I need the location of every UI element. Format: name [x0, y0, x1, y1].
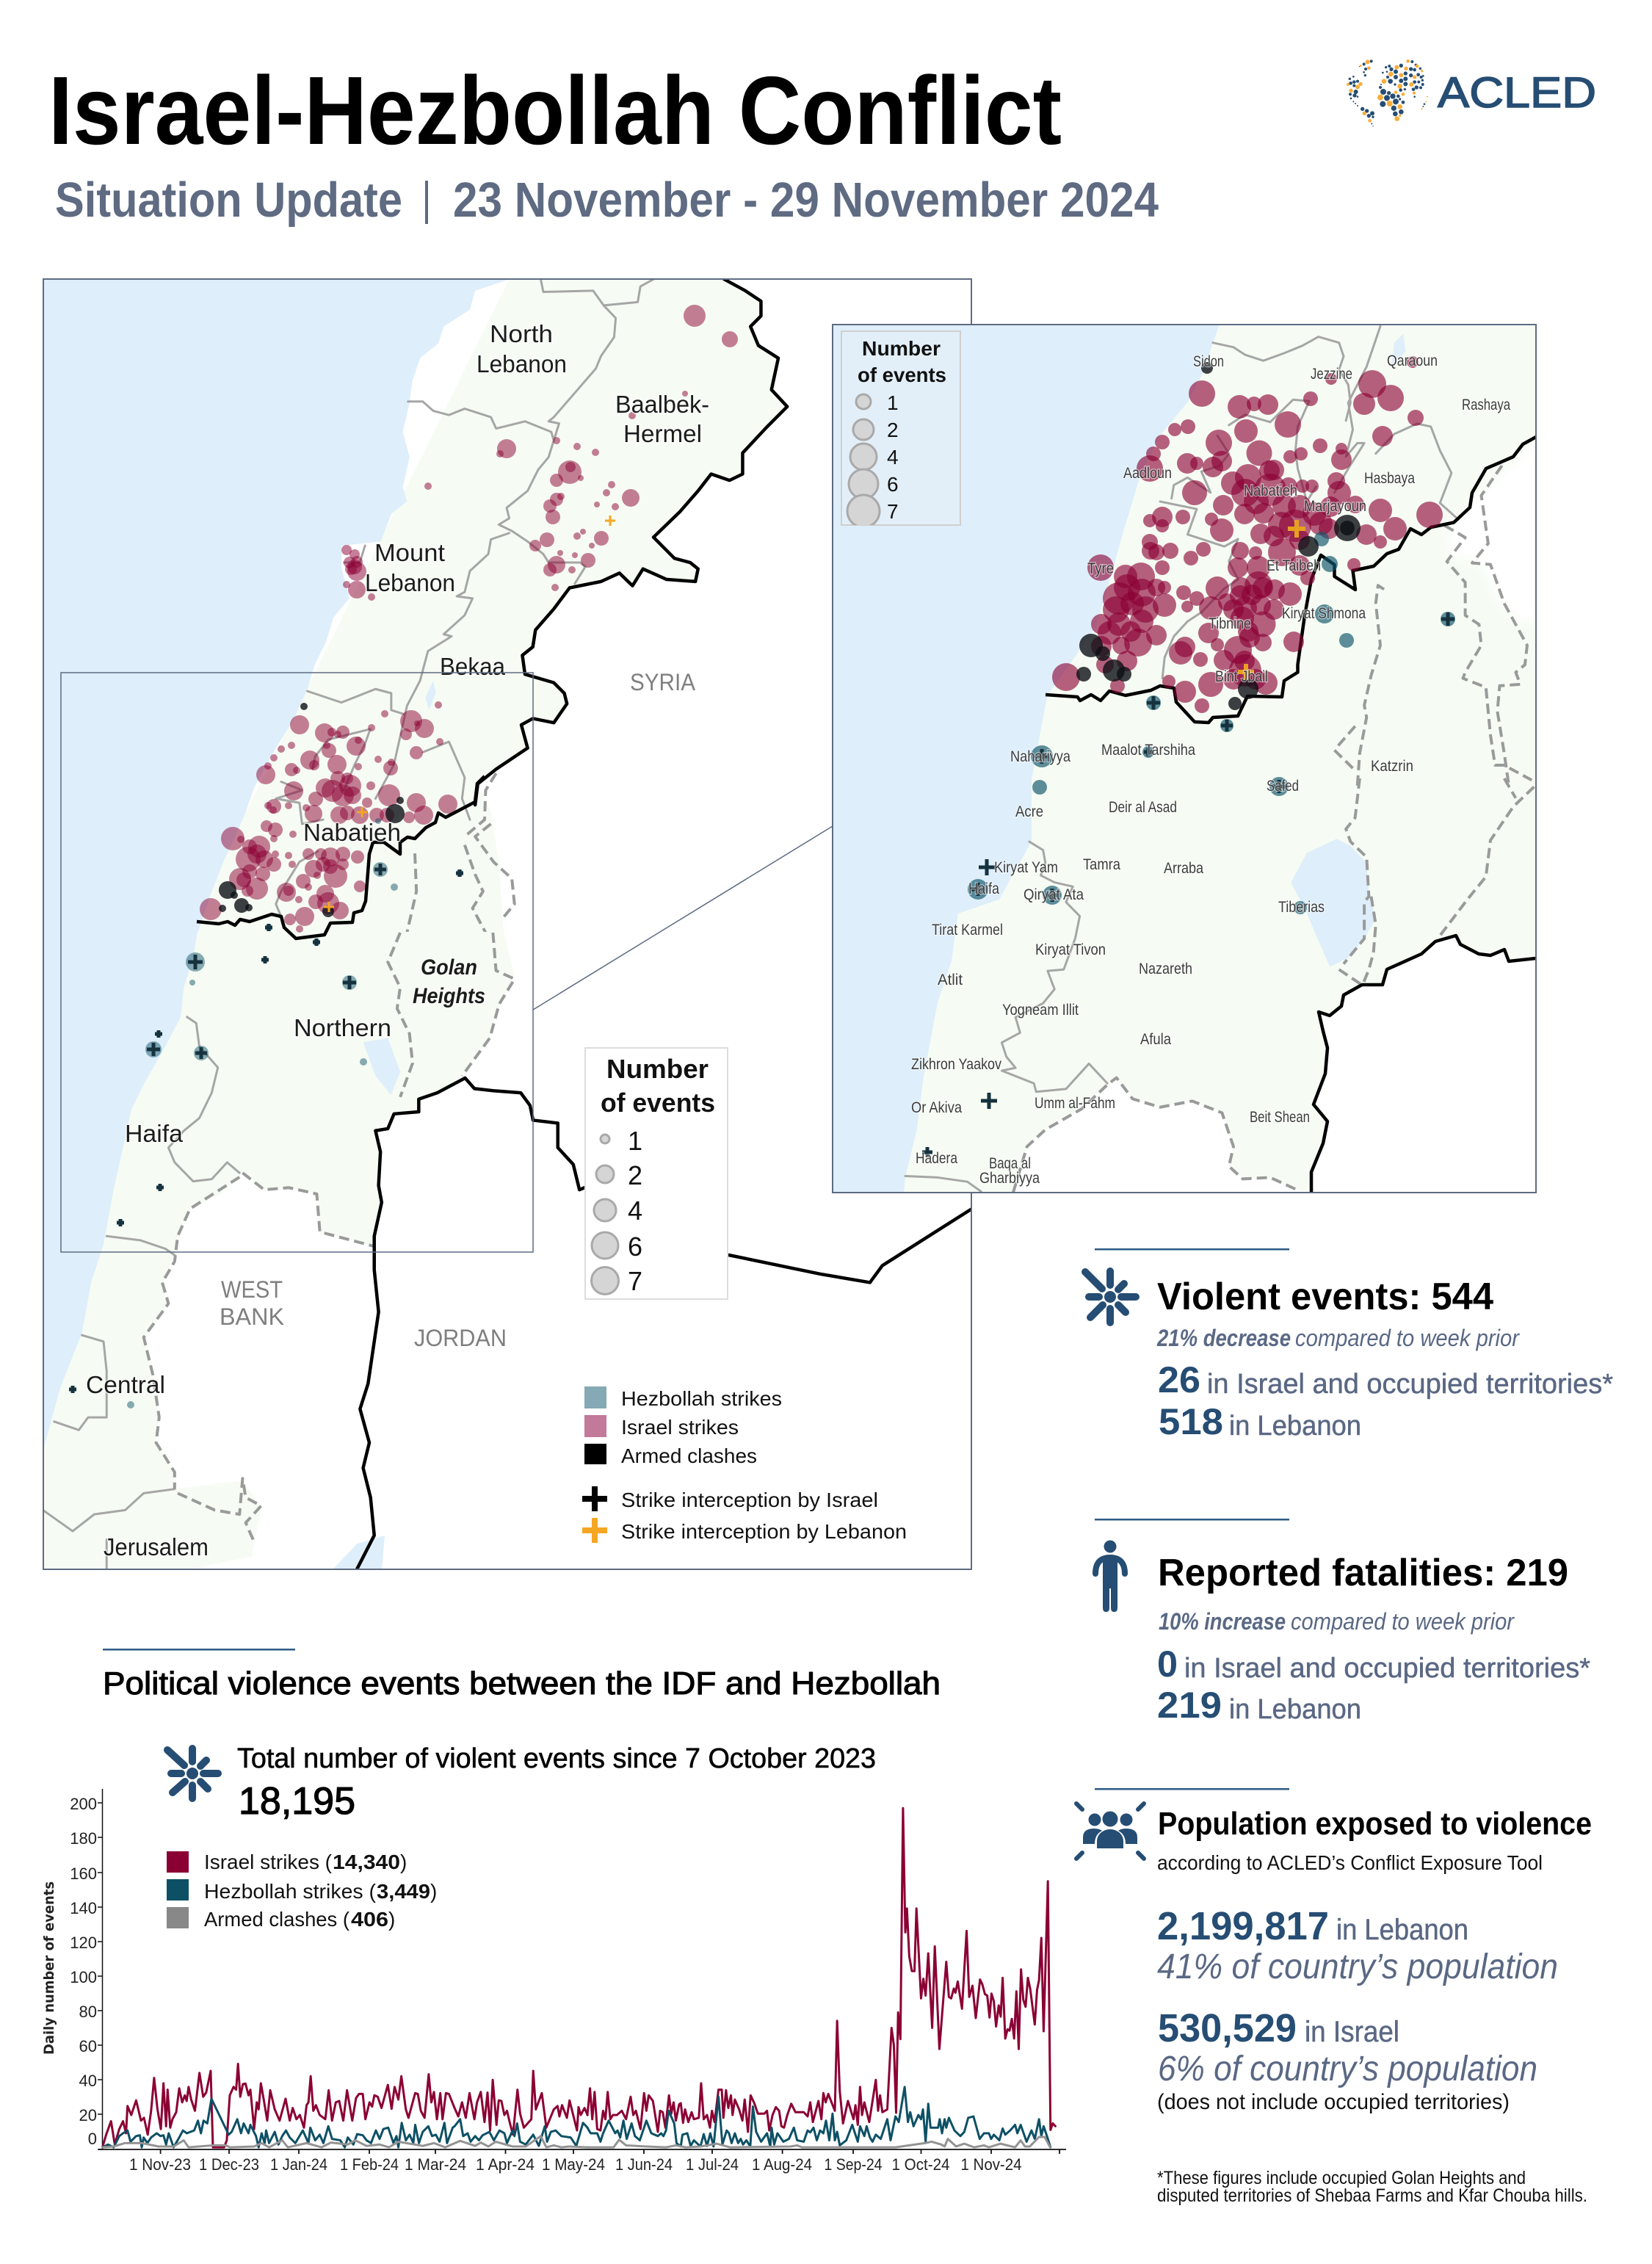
- y axis: 120: [70, 1934, 97, 1952]
- icon: violence spark: [167, 1748, 218, 1798]
- inset: place labels: Atlit: [938, 972, 963, 988]
- x axis: 1 Aug-24: [752, 2155, 812, 2174]
- x axis: 1 Oct-24: [891, 2155, 950, 2174]
- legend: number of events on inset: 4: [887, 446, 899, 469]
- map region labels: SYRIA: [630, 669, 696, 695]
- legend: number of events on main map: 1: [628, 1126, 642, 1156]
- chart legend: ): [430, 1880, 437, 1903]
- inset: place labels: Maalot Tarshiha: [1101, 742, 1195, 759]
- map region labels: Mount: [374, 539, 445, 566]
- map region labels: Heights: [413, 984, 485, 1008]
- inset: Israel strike bubbles: [1052, 356, 1443, 713]
- panel: population exposed stat: in Israel: [1305, 2016, 1399, 2048]
- legend: event types: Armed clashes: [621, 1444, 757, 1467]
- x axis: 1 Jul-24: [686, 2155, 739, 2174]
- inset: place labels: Beit Shean: [1250, 1109, 1310, 1126]
- legend: number of events on inset: of events: [858, 364, 946, 386]
- map region labels: Lebanon: [365, 569, 455, 596]
- x axis: 1 Apr-24: [476, 2155, 535, 2174]
- map region labels: Hermel: [623, 420, 702, 447]
- legend: number of events on inset: Number: [862, 337, 941, 360]
- map region labels: Nabatieh: [303, 819, 401, 846]
- inset: place labels: Tiberias: [1278, 899, 1325, 916]
- x axis: 1 Feb-24: [340, 2155, 399, 2174]
- map base: Israel, West Bank and Jordan border: [43, 932, 972, 1570]
- panel: population exposed stat: 2,199,817: [1157, 1904, 1329, 1948]
- panel: reported fatalities stat: in Israel and occupied territories*: [1184, 1653, 1590, 1684]
- footnote: disputed territories of Shebaa Farms and Kfar Chouba hills.: [1157, 2185, 1587, 2206]
- panel: reported fatalities stat: 219: [1157, 1685, 1222, 1726]
- inset: place labels: Marjayoun: [1304, 498, 1366, 515]
- legend: number of events on main map: 6: [628, 1232, 642, 1262]
- inset: place labels: Tyre: [1087, 560, 1114, 577]
- southern Lebanon black border on main map: [197, 776, 485, 938]
- inset: place labels: Tamra: [1083, 856, 1120, 873]
- subtitle: situation update dates: Situation Update: [55, 173, 402, 228]
- footnote: *These figures include occupied Golan Heights and: [1157, 2168, 1526, 2188]
- inset: place labels: Katzrin: [1371, 758, 1413, 775]
- inset: place labels: Acre: [1015, 803, 1043, 820]
- x axis: 1 Sep-24: [824, 2155, 883, 2174]
- panel: inset map of southern Lebanon and northern Israel: [833, 325, 1549, 1193]
- map region labels: BANK: [220, 1303, 284, 1330]
- chart legend: [167, 1851, 437, 1931]
- y axis: 180: [70, 1829, 97, 1848]
- inset: place labels: Deir al Asad: [1109, 799, 1177, 816]
- panel: reported fatalities stat: [1095, 1519, 1590, 1726]
- legend: event types: [582, 1386, 907, 1543]
- strike interceptions by Lebanon on main map: [324, 516, 615, 912]
- map region labels: Baalbek-: [615, 391, 709, 418]
- panel: population exposed stat: 6% of country’s population: [1158, 2050, 1537, 2088]
- inset: Lebanese interception crosses: [1238, 520, 1305, 680]
- legend: event types: Hezbollah strikes: [621, 1387, 782, 1410]
- x axis: 1 Mar-24: [405, 2155, 466, 2174]
- inset: place labels: Jezzine: [1311, 366, 1352, 383]
- map region labels: JORDAN: [414, 1325, 507, 1351]
- inset: place labels: Kiryat Tivon: [1035, 941, 1106, 958]
- chart legend: Armed clashes (: [204, 1908, 350, 1931]
- panel: population exposed stat: according to ACLED’s Conflict Exposure Tool: [1157, 1851, 1543, 1874]
- strike interceptions by Israel on main map: [69, 864, 463, 1393]
- panel: violent events stat: 518: [1159, 1401, 1223, 1442]
- y axis: [41, 1789, 103, 2149]
- chart legend: 3,449: [377, 1880, 430, 1903]
- Israel strike bubbles on main map: [200, 305, 738, 933]
- panel: reported fatalities stat: in Lebanon: [1229, 1694, 1361, 1725]
- subtitle: situation update dates: 23 November - 29 November 2024: [453, 173, 1159, 228]
- inset: place labels: Baqa al: [989, 1155, 1031, 1172]
- panel: population exposed stat: 41% of country’s population: [1157, 1947, 1558, 1986]
- inset: place labels: Bint Jbail: [1215, 668, 1268, 685]
- line chart: Israel strikes series: [102, 1808, 1055, 2147]
- inset: place labels: Hadera: [916, 1150, 957, 1167]
- inset: place labels: Afula: [1140, 1031, 1171, 1048]
- total events callout: [237, 1743, 876, 1823]
- legend: event types: Strike interception by Lebanon: [621, 1520, 907, 1543]
- footnote: [1157, 2168, 1587, 2206]
- panel: violent events stat: in Lebanon: [1229, 1411, 1361, 1442]
- chart legend: ): [388, 1908, 395, 1931]
- inset: place labels: Aadloun: [1123, 465, 1172, 482]
- panel: reported fatalities stat: 10% increase: [1159, 1608, 1286, 1635]
- map region labels: Bekaa: [440, 653, 506, 680]
- panel: violent events stat: in Israel and occupied territories*: [1207, 1369, 1613, 1400]
- y axis: Daily number of events: [41, 1881, 57, 2055]
- x axis: [98, 2149, 1066, 2174]
- y axis: 100: [70, 1968, 97, 1986]
- chart legend: 406: [351, 1908, 388, 1931]
- inset: place labels: Kiryat Yam: [994, 859, 1058, 876]
- line chart: Hezbollah strikes series: [102, 2087, 1051, 2147]
- x axis: 1 Nov-24: [960, 2155, 1022, 2174]
- inset: place labels: Gharbiyya: [979, 1170, 1040, 1187]
- x axis: 1 Nov-23: [129, 2155, 191, 2174]
- legend: number of events on main map: [585, 1048, 728, 1299]
- y axis: 160: [70, 1865, 97, 1883]
- panel: population exposed stat: 530,529: [1158, 2006, 1297, 2050]
- chart legend: 14,340: [333, 1851, 400, 1873]
- inset: place labels: Kiryat Shmona: [1282, 605, 1366, 622]
- y axis: 60: [79, 2037, 97, 2055]
- inset: place labels: Or Akiva: [911, 1099, 962, 1116]
- inset: place labels: Zikhron Yaakov: [911, 1056, 1001, 1073]
- inset: place labels: Qiryat Ata: [1024, 886, 1084, 903]
- legend: number of events on main map: of events: [601, 1088, 715, 1118]
- panel: violent events stat: Violent events: 544: [1157, 1276, 1493, 1318]
- inset: grey admin boundaries and lakes: [1160, 326, 1532, 786]
- panel: violent events stat: 21% decrease: [1156, 1325, 1291, 1351]
- map region labels: Haifa: [125, 1120, 184, 1147]
- inset: Hezbollah strike bubbles: [968, 532, 1455, 914]
- inset: place labels: Qaraoun: [1387, 352, 1438, 369]
- inset: place labels: Hasbaya: [1364, 470, 1415, 487]
- chart legend: Israel strikes (: [204, 1851, 333, 1873]
- y axis: 200: [70, 1795, 97, 1813]
- panel: violent events stat: compared to week prior: [1295, 1325, 1520, 1351]
- legend: number of events on main map: 4: [628, 1196, 642, 1226]
- inset: place labels: Arraba: [1164, 860, 1203, 877]
- inset: place labels: Nahariyya: [1010, 748, 1070, 765]
- x axis: 1 May-24: [542, 2155, 605, 2174]
- legend: number of events on inset: 7: [887, 500, 899, 523]
- y axis: 20: [79, 2106, 97, 2124]
- legend: number of events on inset: 2: [887, 419, 899, 441]
- inset: place labels: [911, 352, 1510, 1187]
- chart legend: Hezbollah strikes (: [204, 1880, 377, 1903]
- legend: event types: Strike interception by Israel: [621, 1489, 878, 1511]
- map region labels: [86, 320, 709, 1560]
- title: Israel-Hezbollah Conflict: [48, 57, 1062, 164]
- inset: place labels: Yogneam Illit: [1002, 1002, 1079, 1019]
- x axis: 1 Jan-24: [270, 2155, 327, 2174]
- map region labels: Northern: [294, 1014, 391, 1041]
- inset: place labels: Umm al-Fahm: [1035, 1095, 1115, 1112]
- y axis: 140: [70, 1899, 97, 1917]
- panel: population exposed stat: (does not include occupied territories): [1157, 2090, 1510, 2114]
- panel: population exposed stat: [1076, 1788, 1592, 2114]
- inset: place labels: Rashaya: [1462, 397, 1510, 413]
- legend: number of events on main map: Number: [606, 1054, 709, 1084]
- legend: number of events on main map: 2: [628, 1160, 642, 1190]
- inset: place labels: Tibnine: [1209, 615, 1251, 632]
- chart legend: ): [400, 1851, 407, 1873]
- inset: place labels: Et Taibeh: [1267, 557, 1321, 574]
- panel: violent events stat: [1085, 1248, 1613, 1442]
- icon: violence spark: [1085, 1271, 1136, 1323]
- inset: Galilee lake, Israel boundaries: [905, 778, 1534, 1193]
- logo: ACLED: ACLED: [1438, 69, 1596, 117]
- legend: number of events on inset: 6: [887, 473, 899, 496]
- inset: place labels: Nabatieh: [1244, 482, 1297, 499]
- map region labels: Jerusalem: [104, 1533, 209, 1560]
- inset: black international borders: [1046, 437, 1536, 1193]
- panel: reported fatalities stat: Reported fatalities: 219: [1158, 1552, 1568, 1594]
- icon: person: [1095, 1541, 1125, 1612]
- legend: number of events on inset: [841, 331, 960, 527]
- logo: ACLED: [1347, 59, 1596, 126]
- map region labels: Central: [86, 1371, 165, 1398]
- total events callout: 18,195: [239, 1780, 355, 1823]
- map region labels: Golan: [421, 955, 477, 980]
- legend: number of events on main map: 7: [628, 1266, 642, 1296]
- Hezbollah strike bubbles on main map: [127, 818, 463, 1408]
- inset: place labels: Sidon: [1193, 353, 1224, 370]
- map region labels: WEST: [221, 1276, 283, 1303]
- x axis: 1 Jun-24: [615, 2155, 673, 2174]
- chart heading: Political violence events between the IDF and Hezbollah: [103, 1666, 941, 1701]
- y axis: 40: [79, 2072, 97, 2090]
- panel: main regional map: [43, 279, 972, 1570]
- total events callout: Total number of violent events since 7 October 2023: [237, 1743, 876, 1774]
- panel: reported fatalities stat: 0: [1157, 1643, 1178, 1685]
- panel: political violence events chart: [41, 1649, 1066, 2174]
- map base: northern Lebanon land and sea: [43, 279, 787, 934]
- panel: population exposed stat: Population exposed to violence: [1158, 1806, 1592, 1842]
- inset: place labels: Tirat Karmel: [932, 922, 1003, 938]
- inset: armed clash bubbles: [1076, 362, 1361, 710]
- y axis: 0: [88, 2130, 97, 2148]
- panel: violent events stat: 26: [1158, 1359, 1200, 1400]
- panel: population exposed stat: in Lebanon: [1336, 1914, 1468, 1946]
- inset: place labels: Nazareth: [1139, 961, 1192, 977]
- inset: place labels: Haifa: [968, 880, 999, 897]
- inset: strike interception crosses: [922, 612, 1454, 1157]
- armed clash bubbles on main map: [219, 703, 405, 917]
- map region labels: Lebanon: [477, 350, 567, 377]
- subtitle: situation update dates: [55, 173, 1159, 228]
- map region labels: North: [490, 320, 553, 347]
- x axis: 1 Dec-23: [199, 2155, 259, 2174]
- legend: event types: Israel strikes: [621, 1416, 739, 1439]
- y axis: 80: [79, 2003, 97, 2021]
- icon: exposed population group: [1076, 1804, 1144, 1859]
- line chart: armed clashes series: [102, 2136, 1050, 2147]
- inset: place labels: Safed: [1267, 778, 1299, 795]
- panel: reported fatalities stat: compared to week prior: [1291, 1608, 1515, 1635]
- legend: number of events on inset: 1: [887, 391, 899, 414]
